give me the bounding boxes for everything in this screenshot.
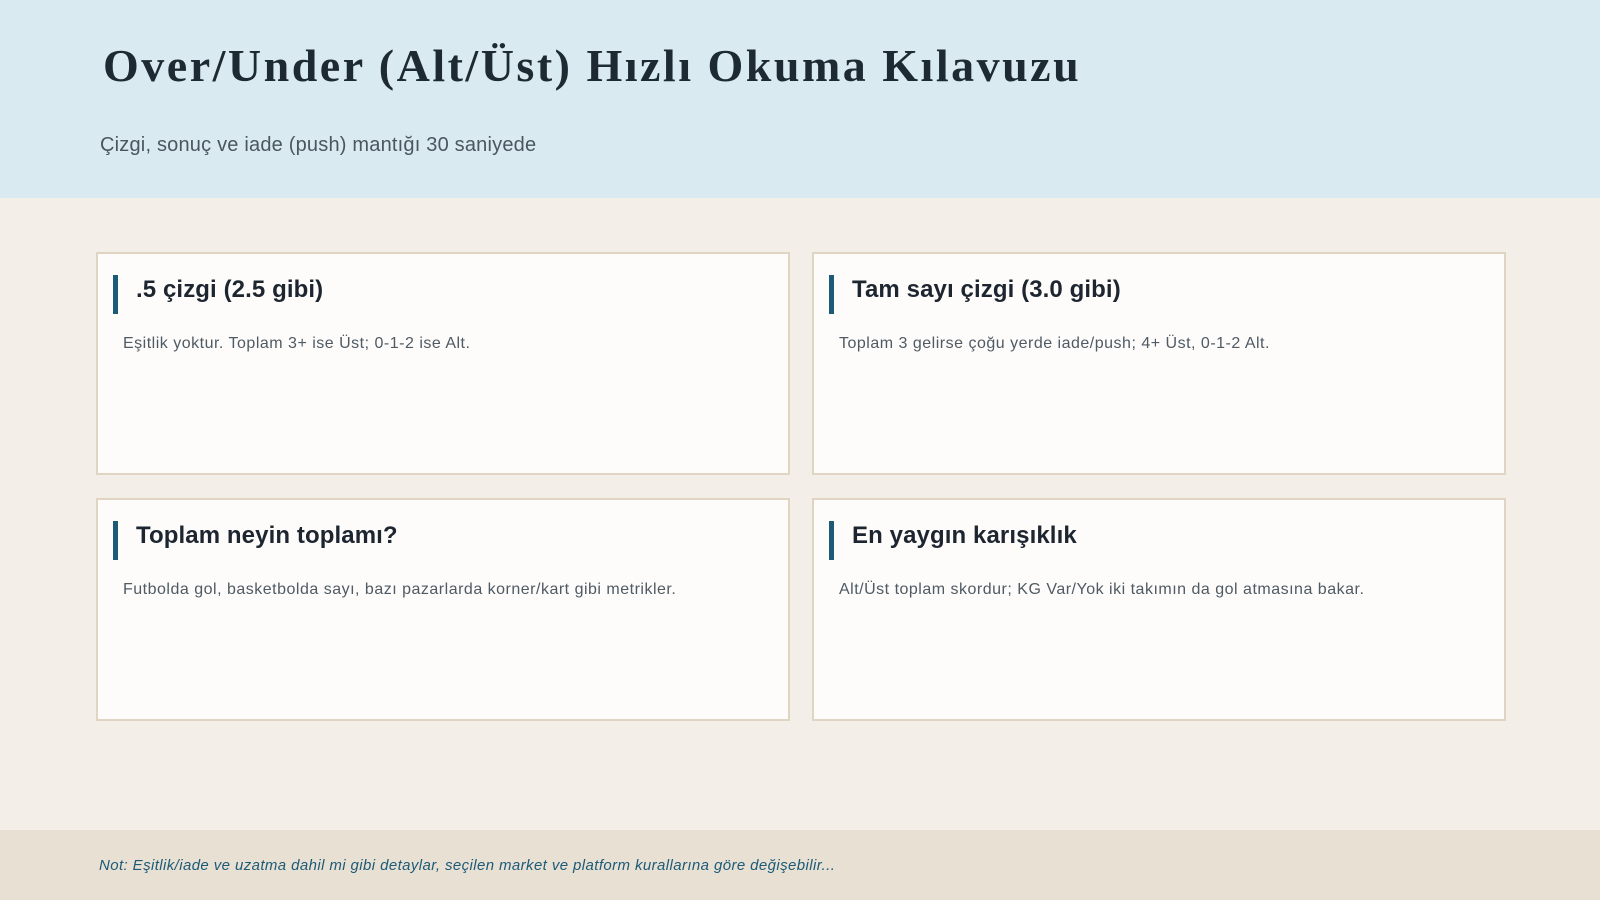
title: Over/Under (Alt/Üst) Hızlı Okuma Kılavuzu bbox=[103, 40, 1081, 91]
text: Toplam 3 gelirse çoğu yerde iade/push; 4+ Üst, 0-1-2 Alt. bbox=[839, 335, 1270, 352]
footer note bbox=[0, 830, 1600, 900]
panel: .5 line bbox=[96, 252, 790, 475]
subtitle: Çizgi, sonuç ve iade (push) mantığı 30 saniyede bbox=[100, 134, 536, 156]
text: Futbolda gol, basketbolda sayı, bazı pazarlarda korner/kart gibi metrikler. bbox=[123, 581, 676, 598]
header band bbox=[0, 0, 1600, 198]
heading: Tam sayı çizgi (3.0 gibi) bbox=[852, 276, 1121, 303]
footer note: Not: Eşitlik/iade ve uzatma dahil mi gibi detaylar, seçilen market ve platform kurallarına göre değişebilir... bbox=[99, 857, 835, 874]
heading: .5 çizgi (2.5 gibi) bbox=[136, 276, 323, 303]
panel: common confusion bbox=[812, 498, 1506, 721]
heading: En yaygın karışıklık bbox=[852, 522, 1077, 549]
panel: total of what bbox=[96, 498, 790, 721]
text: Eşitlik yoktur. Toplam 3+ ise Üst; 0-1-2 ise Alt. bbox=[123, 335, 470, 352]
heading: Toplam neyin toplamı? bbox=[136, 522, 398, 549]
panel: whole line bbox=[812, 252, 1506, 475]
text: Alt/Üst toplam skordur; KG Var/Yok iki takımın da gol atmasına bakar. bbox=[839, 581, 1364, 598]
